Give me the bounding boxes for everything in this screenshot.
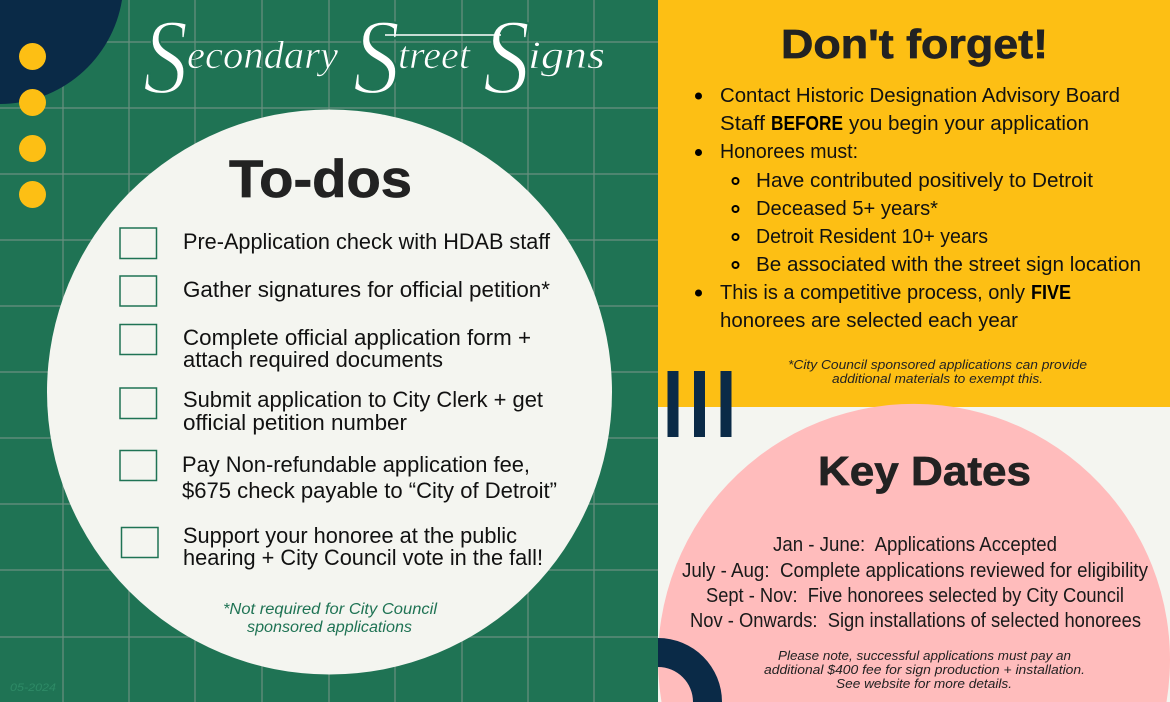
title: econdary bbox=[187, 34, 339, 77]
note: sign fee bbox=[764, 648, 1085, 691]
reminder text: This is a competitive process, only bbox=[720, 281, 1026, 304]
sub-bullets bbox=[732, 178, 738, 268]
reminder text: FIVE bbox=[1031, 281, 1071, 304]
to-do item text: Submit application to City Clerk + get bbox=[183, 387, 543, 412]
reminder text: honorees are selected each year bbox=[720, 309, 1018, 332]
reminder text: Deceased 5+ years* bbox=[756, 197, 938, 220]
reminder text bbox=[720, 84, 1141, 332]
title: igns bbox=[528, 34, 605, 77]
to-do item text: Complete official application form + bbox=[183, 325, 531, 350]
footnote: not required: *Not required for City Council bbox=[223, 601, 438, 618]
reminder text: Detroit Resident 10+ years bbox=[756, 225, 988, 248]
footnote: not required: sponsored applications bbox=[247, 619, 412, 636]
reminder text: BEFORE bbox=[771, 112, 843, 135]
footnote: sponsored applications bbox=[788, 357, 1087, 386]
reminder text: Have contributed positively to Detroit bbox=[756, 169, 1093, 192]
to-do item text: hearing + City Council vote in the fall! bbox=[183, 545, 543, 570]
yellow dots bbox=[19, 43, 46, 208]
bullets bbox=[695, 92, 702, 296]
to-do item text: attach required documents bbox=[183, 347, 443, 372]
note: sign fee: Please note, successful applications must pay an bbox=[778, 648, 1071, 663]
title: S bbox=[143, 0, 188, 117]
reminder text: Be associated with the street sign location bbox=[756, 253, 1141, 276]
heading: To-dos: To-dos bbox=[229, 150, 412, 209]
reminder text: Contact Historic Designation Advisory Board bbox=[720, 84, 1120, 107]
date list bbox=[682, 534, 1148, 632]
note: sign fee: See website for more details. bbox=[836, 676, 1012, 691]
heading: Key Dates: Key Dates bbox=[818, 448, 1031, 494]
note: sign fee: additional $400 fee for sign production + installation. bbox=[764, 662, 1085, 677]
footnote: not required bbox=[223, 601, 438, 636]
to-do item text: Gather signatures for official petition* bbox=[183, 277, 550, 302]
checkboxes bbox=[120, 228, 158, 558]
navy corner circle bbox=[0, 0, 122, 104]
panel: green grid background bbox=[0, 0, 658, 702]
to-do item text: official petition number bbox=[183, 410, 407, 435]
heading: Don't forget!: Don't forget! bbox=[781, 21, 1048, 67]
navy bars bbox=[668, 371, 732, 437]
to-do item text: Pre-Application check with HDAB staff bbox=[183, 229, 551, 254]
reminder text: you begin your application bbox=[849, 112, 1089, 135]
to-do item text: Support your honoree at the public bbox=[183, 523, 517, 548]
to-do item text: Pay Non-refundable application fee, bbox=[182, 452, 530, 477]
title bbox=[143, 0, 605, 117]
date list: Sept - Nov: Five honorees selected by City Council bbox=[706, 585, 1124, 607]
title: treet bbox=[398, 34, 471, 77]
footnote: sponsored applications: *City Council sponsored applications can provide bbox=[788, 357, 1087, 372]
date stamp: 05-2024 bbox=[10, 682, 56, 694]
panel: don't forget bbox=[658, 0, 1170, 407]
panel: to-dos circle bbox=[47, 110, 612, 674]
to-do item text: $675 check payable to “City of Detroit” bbox=[182, 478, 557, 503]
date list: Jan - June: Applications Accepted bbox=[773, 534, 1057, 556]
reminder text: Staff bbox=[720, 112, 765, 135]
reminder text: Honorees must: bbox=[720, 140, 858, 163]
date list: July - Aug: Complete applications reviewed for eligibility bbox=[682, 560, 1148, 582]
to-do item text bbox=[182, 229, 557, 570]
panel: cream background bbox=[658, 407, 1170, 702]
title: S bbox=[483, 0, 530, 117]
footnote: sponsored applications: additional materials to exempt this. bbox=[832, 371, 1043, 386]
panel: key dates circle bbox=[658, 404, 1170, 702]
date list: Nov - Onwards: Sign installations of selected honorees bbox=[690, 610, 1141, 632]
title: S bbox=[353, 0, 400, 117]
navy arc bbox=[658, 638, 722, 702]
